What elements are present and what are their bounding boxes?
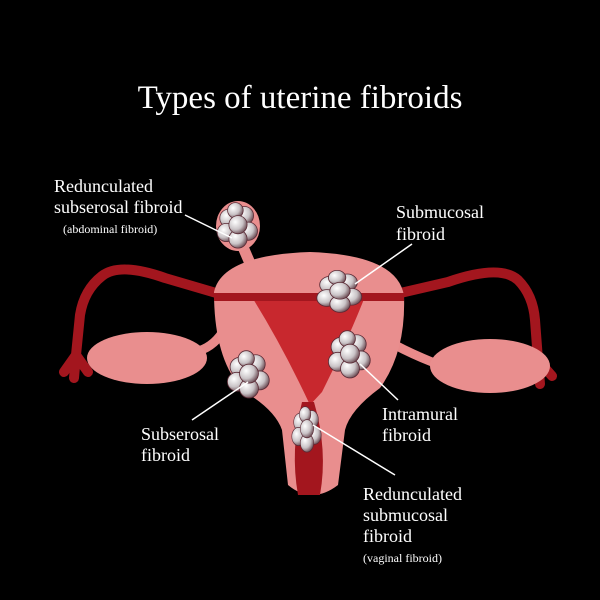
fibroids [217, 203, 258, 248]
illustration: uterus [64, 201, 552, 495]
label: pedunculated subserosal: (abdominal fibroid) [63, 222, 157, 236]
label: pedunculated subserosal: Redunculated [54, 176, 153, 196]
tube crossing [214, 293, 404, 301]
label: intramural: Intramural [382, 404, 458, 424]
label: pedunculated subserosal: subserosal fibroid [54, 197, 182, 217]
label: intramural [382, 404, 458, 445]
title: Types of uterine fibroids [138, 80, 462, 116]
left tube [64, 269, 240, 378]
body [214, 252, 404, 495]
label: subserosal: Subserosal [141, 424, 219, 444]
stalk [240, 240, 252, 268]
label: subserosal [141, 424, 219, 465]
vaginal canal [295, 402, 323, 495]
label: pedunculated submucosal [363, 484, 462, 565]
left ovary [87, 332, 222, 384]
right ovary [395, 339, 550, 393]
label: pedunculated submucosal: fibroid [363, 526, 412, 546]
label: submucosal: fibroid [396, 224, 445, 244]
pedunculated sac [216, 201, 260, 251]
leader lines [185, 215, 412, 475]
label: subserosal: fibroid [141, 445, 190, 465]
label: pedunculated submucosal: (vaginal fibroid) [363, 551, 442, 565]
label: pedunculated subserosal [54, 176, 182, 236]
label: pedunculated submucosal: submucosal [363, 505, 448, 525]
cavity [250, 294, 366, 405]
label: submucosal [396, 202, 484, 244]
label: intramural: fibroid [382, 425, 431, 445]
label: submucosal: Submucosal [396, 202, 484, 222]
right tube [370, 272, 552, 384]
label: pedunculated submucosal: Redunculated [363, 484, 462, 504]
